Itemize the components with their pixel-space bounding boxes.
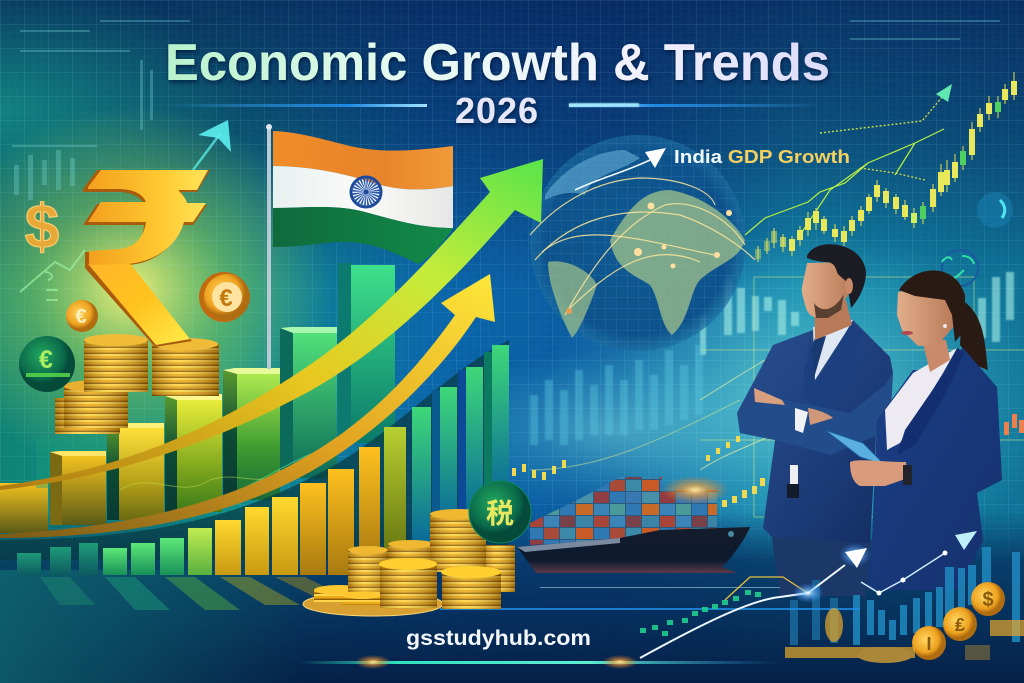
year with glowing rules	[165, 90, 819, 131]
gold coins bottom right: ₤	[955, 615, 965, 635]
bottom band line	[300, 587, 860, 669]
dollar sign: $	[25, 193, 59, 262]
head	[922, 340, 950, 372]
gold coins bottom right	[912, 582, 1005, 660]
man	[737, 244, 893, 596]
blue candles under globe	[530, 345, 703, 445]
woman	[825, 270, 1002, 590]
yellow line	[725, 577, 806, 600]
yellow candles mid right	[512, 436, 765, 507]
lower bar chart	[17, 345, 509, 575]
candlestick chart	[755, 72, 1017, 262]
green tax coin: 税	[486, 498, 514, 529]
gold coins bottom right: I	[926, 634, 932, 654]
orange data strips	[785, 608, 1024, 663]
faint candles behind people	[700, 272, 1014, 355]
green arrow	[0, 159, 543, 490]
green step squares chart	[640, 590, 761, 636]
euro coin large: €	[219, 285, 233, 312]
second trend arrow	[861, 531, 977, 596]
teal hand glyphs	[20, 250, 85, 300]
flag pole	[266, 124, 272, 369]
title: Economic Growth & Trends	[165, 34, 830, 92]
india gdp growth label: India GDP Growth	[674, 147, 850, 167]
year with glowing rules: 2026	[455, 90, 539, 131]
radial teal icon	[977, 192, 1013, 228]
glowing white trend arrow	[640, 543, 871, 658]
faint data panels top left	[12, 20, 1000, 200]
coin stacks behind rupee	[55, 334, 219, 434]
teal frame lines	[530, 277, 1024, 517]
globe	[530, 135, 755, 351]
euro coin small	[66, 300, 98, 332]
upper bar chart	[0, 263, 395, 533]
orange candles right edge	[1004, 414, 1024, 435]
head	[814, 300, 852, 340]
rupee symbol	[83, 170, 210, 347]
bottom centre website: gsstudyhub.com	[406, 626, 591, 650]
green trend line	[745, 129, 944, 235]
india flag	[273, 131, 453, 264]
coins plate and stacks	[303, 509, 515, 616]
container ship	[517, 476, 750, 573]
gold coins bottom right: $	[982, 589, 994, 611]
bottom right bars	[790, 547, 1020, 645]
euro coin small: €	[75, 306, 87, 328]
green rupee glyph circle	[942, 250, 978, 286]
green tax coin	[469, 481, 531, 543]
white arrow over globe	[575, 148, 666, 190]
upward cyan arrow	[193, 120, 231, 170]
dotted trend line with arrow	[820, 84, 952, 133]
euro coin large	[199, 272, 250, 322]
yellow arrow	[0, 274, 495, 538]
floor reflections	[40, 577, 345, 610]
green euro coin: €	[39, 346, 53, 374]
dark backdrop under yellow arrow	[0, 340, 509, 560]
green euro coin	[19, 336, 75, 392]
